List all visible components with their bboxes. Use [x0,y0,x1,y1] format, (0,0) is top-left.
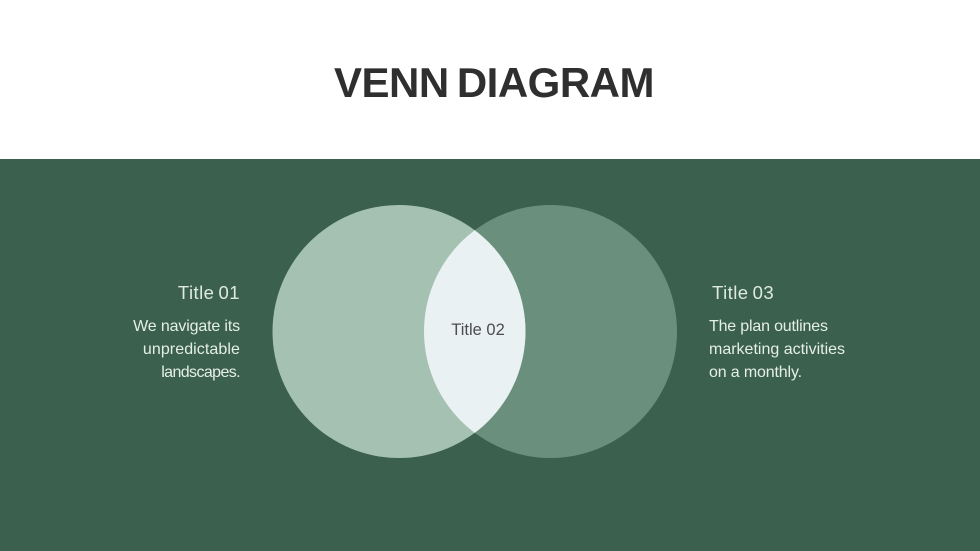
text block: Title 03 [709,282,845,381]
body: Title 01: We navigate its [133,318,240,335]
overlap [424,230,526,433]
heading: Title 01: Title 01 [178,282,240,303]
heading: Title 03: Title 03 [712,282,774,303]
body: Title 01: unpredictable [143,341,240,358]
body: Title 03: marketing activities [709,341,845,358]
label: Title 02: Title 02 [451,321,505,339]
circle: right [424,205,677,458]
body: Title 03: on a monthly. [709,364,802,381]
panel: green background [0,159,980,551]
body: Title 01 [133,318,240,381]
text block: Title 01 [133,282,240,381]
body: Title 01: landscapes. [161,364,240,381]
circle: left [272,205,526,458]
title: VENN DIAGRAM [334,59,654,106]
venn diagram [272,205,677,458]
body: Title 03: The plan outlines [709,318,828,335]
body: Title 03 [709,318,845,381]
